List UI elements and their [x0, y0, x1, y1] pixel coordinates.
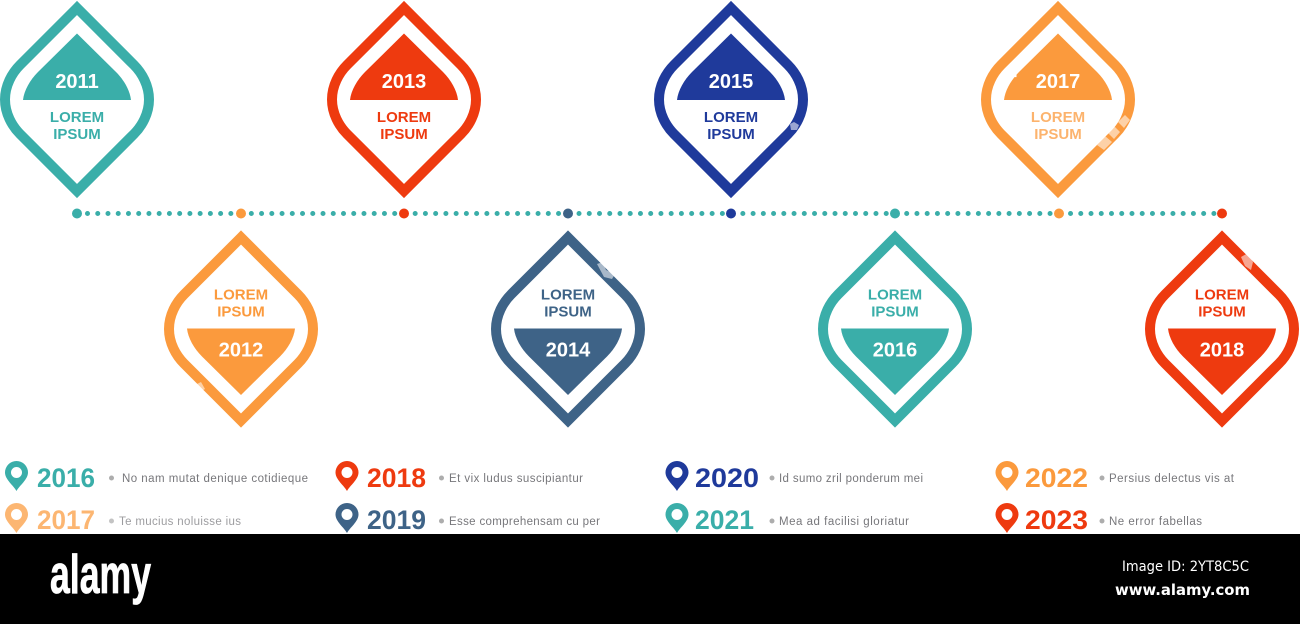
milestone 2017: LOREM — [1031, 109, 1085, 126]
milestone 2018 — [1150, 238, 1294, 420]
milestone 2013: LOREM — [377, 109, 431, 126]
legend item 2023: 2023 — [1025, 505, 1088, 535]
legend item 2023 — [996, 503, 1202, 535]
milestone 2015: LOREM — [704, 109, 758, 126]
legend item 2018: Et vix ludus suscipiantur — [449, 473, 583, 485]
milestone 2014: 2014 — [546, 340, 591, 362]
milestone 2014 — [496, 238, 640, 420]
milestone 2012: LOREM — [214, 286, 268, 304]
milestone 2017 — [986, 8, 1130, 191]
milestone 2016: LOREM — [868, 286, 922, 304]
legend item 2020 — [666, 461, 923, 493]
legend item 2021: 2021 — [695, 505, 754, 535]
footer band: Image ID: 2YT8C5C — [1122, 559, 1249, 575]
legend item 2018: 2018 — [367, 463, 426, 493]
milestone 2013: IPSUM — [380, 126, 428, 143]
milestone 2013 — [332, 8, 476, 191]
legend item 2022: Persius delectus vis at — [1109, 473, 1235, 485]
milestone 2018: LOREM — [1195, 286, 1249, 304]
milestone 2011 — [5, 8, 149, 191]
milestone 2018: IPSUM — [1198, 304, 1246, 320]
legend item 2020: Id sumo zril ponderum mei — [779, 473, 923, 485]
milestone 2017: IPSUM — [1034, 126, 1082, 143]
milestone 2018: 2018 — [1200, 340, 1244, 362]
legend item 2019 — [336, 503, 600, 535]
legend item 2017 — [5, 503, 241, 535]
milestone 2015 — [659, 8, 803, 191]
legend item 2021: Mea ad facilisi gloriatur — [779, 516, 909, 528]
timeline — [72, 208, 1227, 218]
milestone 2016: 2016 — [873, 340, 917, 362]
legend item 2017: Te mucius noluisse ius — [119, 516, 241, 528]
legend item 2021 — [666, 503, 909, 535]
legend item 2022 — [996, 461, 1235, 493]
legend item 2016: No nam mutat denique cotidieque — [122, 473, 308, 485]
legend item 2019: 2019 — [367, 505, 426, 535]
legend item 2016: 2016 — [37, 463, 95, 493]
legend item 2016 — [5, 461, 308, 493]
legend item 2018 — [336, 461, 583, 493]
watermark traces — [195, 115, 1253, 392]
legend item 2023: Ne error fabellas — [1109, 516, 1202, 528]
milestone 2012 — [169, 238, 313, 420]
milestone 2015: 2015 — [709, 71, 753, 93]
milestone 2012: 2012 — [219, 340, 263, 362]
milestone 2014: IPSUM — [544, 304, 592, 320]
legend item 2022: 2022 — [1025, 463, 1088, 493]
legend item 2020: 2020 — [695, 463, 759, 493]
milestone 2016 — [823, 238, 967, 420]
milestone 2011: LOREM — [50, 109, 104, 126]
footer band: alamy — [50, 543, 151, 605]
milestone 2011: 2011 — [55, 71, 99, 93]
milestone 2017: 2017 — [1036, 71, 1080, 93]
footer band: www.alamy.com — [1115, 581, 1250, 599]
legend item 2017: 2017 — [37, 505, 95, 535]
milestone 2011: IPSUM — [53, 126, 101, 143]
milestone 2015: IPSUM — [707, 126, 755, 143]
legend item 2019: Esse comprehensam cu per — [449, 516, 600, 528]
milestone 2016: IPSUM — [871, 304, 919, 320]
milestone 2012: IPSUM — [217, 304, 265, 320]
milestone 2013: 2013 — [382, 71, 426, 93]
footer band — [0, 534, 1300, 624]
milestone 2014: LOREM — [541, 286, 595, 304]
